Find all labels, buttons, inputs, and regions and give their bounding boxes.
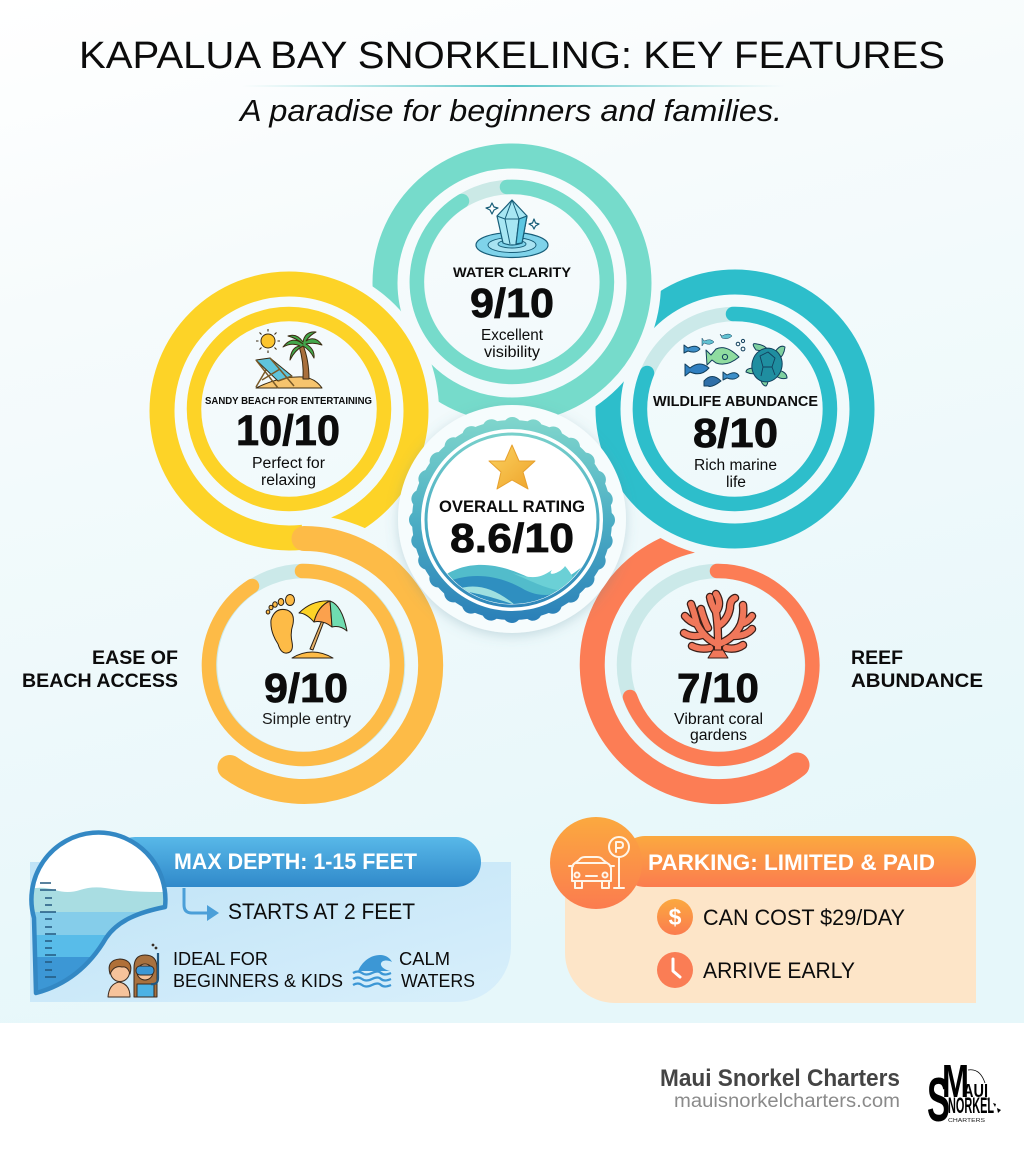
label: ease of beach access: EASE OF [92, 648, 178, 669]
progress ring [209, 571, 398, 759]
icon: beach chair and palm [256, 329, 322, 388]
score: 9/10 [264, 665, 348, 711]
icon: calm wave [353, 955, 392, 986]
score: 7/10 [677, 665, 759, 711]
progress ring [417, 187, 607, 377]
logo: CHARTERS [948, 1118, 986, 1124]
icon: crystal in water [476, 200, 548, 258]
badge disc [398, 405, 626, 633]
title underline [242, 85, 784, 87]
panel: max depth [30, 833, 511, 1002]
text: ideal for: IDEAL FOR [173, 948, 268, 969]
description: life [726, 474, 746, 491]
progress ring [624, 571, 812, 759]
wave [448, 564, 582, 604]
panel: wildlife abundance [608, 282, 862, 536]
logo: S [927, 1066, 950, 1135]
label: ease of beach access [22, 648, 178, 692]
description: Vibrant coral [674, 711, 763, 728]
label: reef abundance: REEF [851, 648, 903, 669]
footer background [0, 1023, 1024, 1154]
progress ring [194, 314, 384, 504]
heading: PARKING: LIMITED & PAID [648, 850, 935, 875]
icon: star [489, 445, 535, 489]
depth gauge [30, 833, 170, 997]
text: calm waters: WATERS [401, 970, 475, 991]
header pill [620, 836, 976, 887]
panel: water clarity [385, 156, 639, 410]
label: WATER CLARITY [453, 265, 571, 280]
logo [927, 1055, 1001, 1135]
icon: dollar: $ [669, 904, 682, 930]
icon: fish and turtle [684, 334, 787, 386]
text: ideal for: BEGINNERS & KIDS [173, 970, 343, 991]
logo: AUI [963, 1081, 988, 1101]
description [694, 457, 777, 491]
footer: brand name: Maui Snorkel Charters [660, 1065, 900, 1092]
outer ring [608, 282, 862, 536]
progress ring [640, 314, 830, 504]
outer ring [230, 538, 431, 791]
label: WILDLIFE ABUNDANCE [653, 394, 818, 410]
scalloped edge [412, 420, 612, 620]
description: Simple entry [262, 711, 351, 728]
icon circle [550, 817, 642, 909]
logo: M [942, 1055, 969, 1107]
header pill [110, 837, 481, 887]
score: 8.6/10 [450, 515, 574, 561]
arrow [184, 888, 219, 921]
icon: footprint and umbrella [266, 594, 347, 658]
text: starts at: STARTS AT 2 FEET [228, 899, 415, 924]
panel: sandy beach [162, 284, 416, 538]
badge: overall rating [398, 405, 626, 633]
label: SANDY BEACH FOR ENTERTAINING [205, 395, 372, 407]
description: relaxing [261, 472, 316, 489]
panel: reef abundance [592, 541, 812, 792]
title: KAPALUA BAY SNORKELING: KEY FEATURES [79, 35, 945, 77]
text: arrive early: ARRIVE EARLY [703, 958, 855, 983]
score: 8/10 [693, 410, 778, 456]
description: Rich marine [694, 457, 777, 474]
heading: MAX DEPTH: 1-15 FEET [174, 849, 418, 874]
icon: dollar [657, 899, 693, 935]
subtitle: A paradise for beginners and families. [238, 93, 782, 128]
icon: coral [684, 594, 752, 658]
text: cost: CAN COST $29/DAY [703, 905, 905, 930]
score: 9/10 [470, 280, 554, 326]
icon: car and parking sign [569, 837, 629, 888]
outer ring [162, 284, 416, 538]
description [252, 455, 325, 489]
footer: website: mauisnorkelcharters.com [674, 1091, 900, 1112]
panel: beach access [209, 538, 431, 791]
panel: parking [550, 817, 976, 1003]
description [674, 711, 763, 744]
panel background [565, 862, 976, 1003]
description: gardens [690, 727, 747, 744]
panel background [30, 862, 511, 1002]
description: Perfect for [252, 455, 325, 472]
label: OVERALL RATING [439, 497, 585, 516]
description [481, 327, 544, 361]
text: calm waters: CALM [399, 948, 450, 969]
outer ring [592, 541, 797, 792]
icon: clock [657, 952, 693, 988]
description: visibility [484, 344, 540, 361]
label: ease of beach access: BEACH ACCESS [22, 671, 178, 692]
outer ring [385, 156, 639, 410]
text: ideal for [173, 948, 343, 991]
label: reef abundance [851, 648, 983, 692]
description: Excellent [481, 327, 544, 344]
label: reef abundance: ABUNDANCE [851, 671, 983, 692]
score: 10/10 [236, 407, 340, 455]
text: calm waters [399, 948, 475, 991]
icon: kids with snorkel [108, 944, 158, 997]
